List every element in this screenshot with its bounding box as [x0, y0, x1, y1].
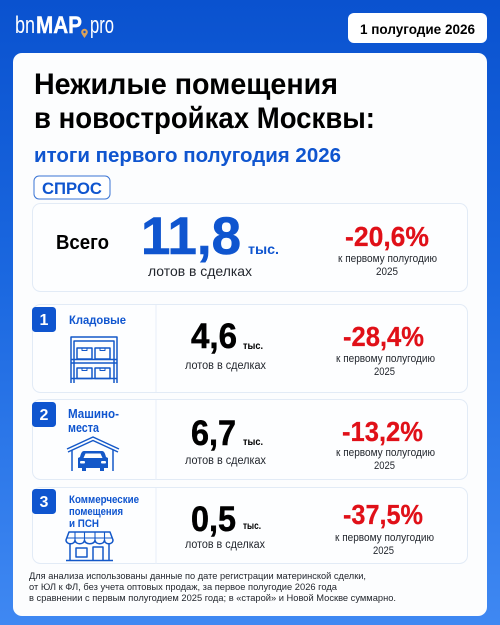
title: Нежилые помещения: [34, 68, 338, 101]
category label: места: [68, 421, 100, 435]
number badge 2: 2: [40, 407, 49, 424]
storage value: 4,6: [191, 317, 237, 356]
number badge 1: 1: [40, 312, 49, 329]
category label: помещения: [69, 506, 123, 518]
panel: commercial premises: [32, 488, 468, 564]
section tag: demand: СПРОС: [42, 180, 102, 198]
storage change caption: 2025: [374, 366, 395, 378]
storage change: -28,4%: [343, 321, 424, 352]
total change caption: 2025: [376, 266, 398, 278]
parking caption: лотов в сделках: [185, 455, 266, 467]
section tag: demand: [34, 176, 110, 199]
category label: [68, 407, 119, 435]
panel: total: [32, 204, 468, 292]
storage change caption: [336, 353, 435, 378]
footnote: [29, 571, 396, 604]
total change caption: [338, 253, 437, 278]
commercial change caption: к первому полугодию: [335, 532, 434, 544]
icon: car in garage: [67, 437, 119, 471]
parking change caption: 2025: [374, 460, 395, 472]
parking change caption: [336, 447, 435, 472]
footnote: в сравнении с первым полугодием 2025 года; в «старой» и Новой Москве суммарно.: [29, 593, 396, 604]
period badge: [348, 13, 487, 43]
number badge 1: [32, 307, 56, 332]
footnote: Для анализа использованы данные по дате регистрации материнской сделки,: [29, 571, 366, 582]
parking value: тыс.: [243, 437, 263, 448]
category label: Кладовые: [69, 313, 126, 327]
period badge: 1 полугодие 2026: [360, 22, 475, 37]
panel: storage rooms: [32, 304, 468, 392]
total value: тыс.: [248, 241, 279, 257]
storage value: [191, 317, 263, 356]
title: [34, 68, 375, 135]
category label: [69, 494, 139, 530]
total value: 11,8: [141, 207, 241, 266]
logo: bnMAP.pro: pro: [90, 12, 114, 39]
storage value: тыс.: [243, 341, 263, 352]
parking value: 6,7: [191, 414, 236, 453]
parking change: -13,2%: [342, 416, 423, 447]
commercial value: 0,5: [191, 500, 236, 539]
category label: и ПСН: [69, 518, 99, 530]
commercial change caption: [335, 532, 434, 557]
total change: -20,6%: [345, 221, 429, 252]
commercial change: -37,5%: [343, 499, 423, 530]
parking change caption: к первому полугодию: [336, 447, 435, 459]
storage change caption: к первому полугодию: [336, 353, 435, 365]
logo: bnMAP.pro: [15, 12, 114, 39]
commercial value: [191, 500, 261, 539]
commercial caption: лотов в сделках: [185, 539, 265, 551]
category label: Коммерческие: [69, 494, 139, 506]
storage caption: лотов в сделках: [185, 360, 266, 372]
footnote: от ЮЛ к ФЛ, без учета оптовых продаж, за первое полугодие 2026 года: [29, 582, 338, 593]
number badge 3: 3: [40, 494, 49, 511]
title: в новостройках Москвы:: [34, 102, 375, 135]
logo: bnMAP.pro: bn: [15, 12, 35, 39]
total label: Всего: [56, 232, 109, 254]
commercial value: тыс.: [243, 521, 261, 532]
number badge 3: [32, 489, 56, 514]
category label: Машино-: [68, 407, 119, 421]
logo: bnMAP.pro: MAP: [36, 12, 82, 39]
number badge 2: [32, 402, 56, 427]
parking value: [191, 414, 263, 453]
total change caption: к первому полугодию: [338, 253, 437, 265]
subtitle: итоги первого полугодия 2026: [34, 144, 341, 167]
icon: shop: [66, 532, 113, 560]
panel: parking spaces: [32, 400, 468, 480]
commercial change caption: 2025: [373, 545, 394, 557]
icon: storage shelves: [71, 337, 117, 383]
total caption: лотов в сделках: [148, 263, 252, 279]
